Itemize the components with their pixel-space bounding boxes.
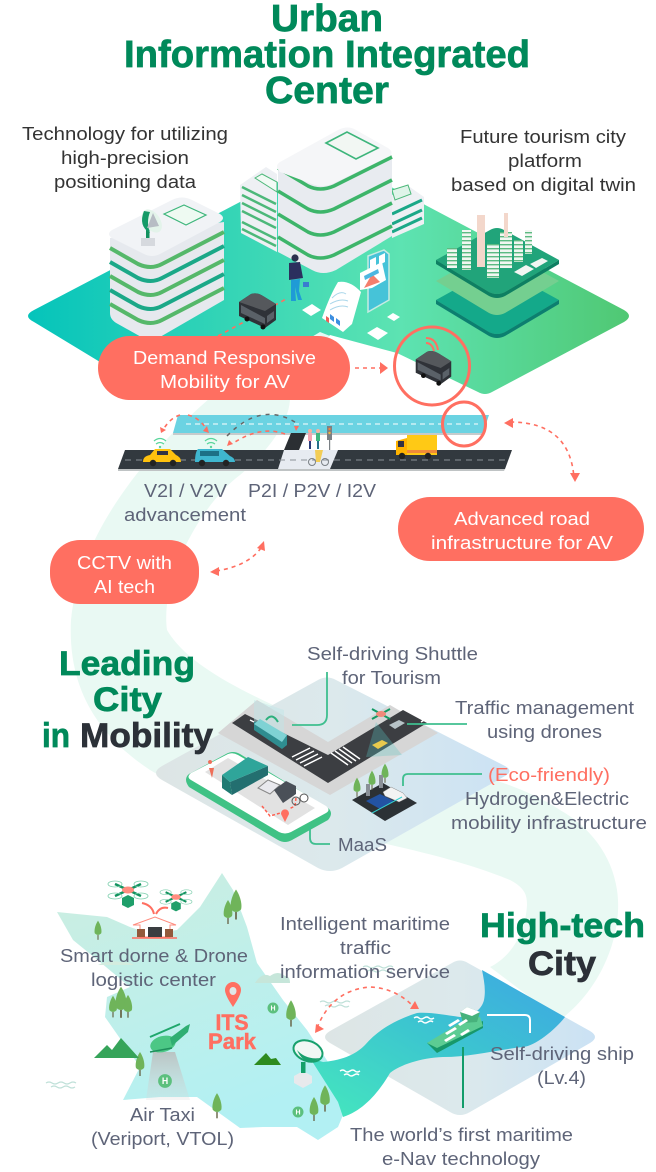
vehicle: yellow car: [143, 438, 181, 466]
icon: mountains: [94, 1038, 281, 1065]
title: Information Integrated: [124, 34, 530, 76]
labels: mobility features: Self-driving Shuttle: [307, 643, 478, 664]
labels: V2I, P2I: [124, 480, 377, 525]
labels: smart drone logistic center: logistic center: [91, 969, 216, 990]
road: upper blue lane: [173, 415, 489, 435]
chart: road intersection: [218, 700, 438, 795]
arrow: CCTV link: [210, 541, 265, 576]
labels: mobility features: MaaS: [338, 834, 387, 855]
title: [124, 0, 530, 112]
connector: MaaS label: [310, 826, 330, 844]
callout: CCTV with AI tech: CCTV with: [77, 552, 172, 573]
heading: Leading City in Mobility: [42, 645, 213, 755]
building: central office tower: [240, 128, 424, 273]
heading: High-tech City: High-tech: [480, 907, 645, 945]
callout: demand responsive mobility: Demand Responsive: [133, 347, 316, 368]
icon: satellite dish: [290, 1036, 326, 1088]
labels: mobility features: Traffic management: [455, 697, 634, 718]
text: digital twin platform: Future tourism city: [460, 126, 627, 147]
arrow: road to infrastructure callout: [504, 418, 580, 482]
heading: Leading City in Mobility: Leading: [59, 645, 195, 683]
waves on sea: [340, 1017, 434, 1076]
vehicle: shuttle on platform: [239, 293, 276, 330]
labels: mobility features: mobility infrastructure: [451, 812, 647, 833]
connector: eco label: [403, 774, 482, 786]
arrow: bubble to autonomous shuttle: [355, 362, 388, 374]
labels: smart drone logistic center: [60, 945, 248, 990]
callout: demand responsive mobility: [98, 336, 350, 400]
map: sea channel: [310, 970, 565, 1117]
text: digital twin platform: [451, 126, 636, 195]
icon: ITS park pin and name: ITS: [216, 1010, 248, 1035]
labels: e-Nav technology: The world’s first maritime: [350, 1124, 573, 1145]
labels: V2I, P2I: P2I / P2V / I2V: [248, 480, 377, 501]
labels: self-driving ship: (Lv.4): [537, 1067, 586, 1088]
icon: EV charging station: [352, 764, 417, 821]
map: ITS park land: [57, 873, 343, 1140]
icon: tourism shuttle bus: [254, 700, 287, 749]
connector: ship label: [487, 1015, 530, 1033]
text: positioning data technology: [22, 123, 228, 192]
heading: High-tech City: City: [528, 945, 596, 983]
icon: autonomous shuttle in ring: [394, 327, 470, 405]
arrows: V2X communication arcs: [160, 414, 299, 446]
trees on land: [95, 890, 330, 1121]
arrow: maritime communication arc: [315, 987, 419, 1033]
labels: intelligent maritime service: [280, 913, 450, 982]
pedestrians, cyclist and traffic light: [308, 426, 332, 466]
background mint S-curve band: [71, 398, 618, 1020]
callout: demand responsive mobility: Mobility for AV: [160, 371, 291, 392]
text: positioning data technology: high-precision: [61, 147, 189, 168]
text: digital twin platform: platform: [508, 150, 582, 171]
connector: traffic label: [407, 723, 467, 725]
dashed link shuttle to person: [218, 298, 288, 336]
heading: Leading City in Mobility: Mobility: [80, 717, 213, 755]
icon: traffic drone with scan cone: [366, 709, 405, 757]
labels: air taxi: Air Taxi: [130, 1104, 195, 1125]
labels: e-Nav technology: [350, 1124, 573, 1169]
data phone and report scroll: [302, 250, 400, 343]
ring: road infrastructure: [442, 402, 486, 446]
icon: autonomous ship: [427, 1007, 483, 1053]
panel: green data center platform: [28, 158, 629, 394]
text: positioning data technology: positioning data: [54, 171, 197, 192]
building: left satellite tower: [109, 198, 224, 340]
callout: advanced road infrastructure: Advanced road: [454, 508, 590, 529]
labels: mobility features: (Eco-friendly): [488, 764, 610, 785]
labels: e-Nav technology: e-Nav technology: [382, 1148, 541, 1169]
heading: Leading City in Mobility: in: [42, 717, 70, 755]
figure: business person: [289, 254, 309, 301]
icon: logistics center: [132, 917, 177, 938]
labels: mobility features: Hydrogen&Electric: [465, 788, 629, 809]
text: digital twin platform: based on digital twin: [451, 174, 636, 195]
labels: V2I, P2I: advancement: [124, 504, 246, 525]
icon: smartphone MaaS map: [186, 752, 331, 842]
road: lower dark road with crossing: [118, 433, 512, 471]
text: positioning data technology: Technology for utilizing: [22, 123, 228, 144]
labels: intelligent maritime service: traffic: [340, 937, 391, 958]
panel: digital twin city layers: [436, 213, 559, 338]
vehicle: blue car: [195, 438, 235, 466]
icon: air taxi helicopter: [146, 1024, 190, 1100]
callout: CCTV with AI tech: [50, 540, 199, 604]
callout: CCTV with AI tech: AI tech: [94, 576, 155, 597]
labels: smart drone logistic center: Smart dorne & Drone: [60, 945, 248, 966]
heading: Leading City in Mobility: City: [93, 681, 162, 719]
labels: mobility features: for Tourism: [342, 667, 441, 688]
labels: intelligent maritime service: information service: [280, 961, 450, 982]
callout: advanced road infrastructure: infrastructure for AV: [431, 532, 614, 553]
labels: air taxi: (Veriport, VTOL): [91, 1128, 234, 1149]
icons: helipads: [268, 1002, 304, 1118]
labels: V2I, P2I: V2I / V2V: [144, 480, 228, 501]
icon: delivery drones: [108, 881, 192, 914]
connector: shuttle label: [292, 672, 327, 725]
labels: self-driving ship: Self-driving ship: [490, 1043, 634, 1064]
labels: intelligent maritime service: Intelligent maritime: [280, 913, 450, 934]
vehicle: yellow truck: [396, 435, 437, 459]
icon: ITS park pin and name: Park: [208, 1029, 257, 1054]
icon: ITS park pin and name: [208, 982, 257, 1054]
labels: air taxi: [91, 1104, 234, 1149]
connector: e-Nav label: [462, 1047, 464, 1108]
panel: mobility platform: [156, 678, 510, 871]
labels: mobility features: using drones: [487, 721, 602, 742]
clouds and waves: [46, 961, 393, 1088]
heading: High-tech City: [480, 907, 645, 983]
labels: self-driving ship: [490, 1043, 634, 1088]
labels: mobility features: [307, 643, 647, 855]
callout: advanced road infrastructure: [398, 497, 644, 561]
title: Center: [265, 70, 389, 112]
panel: maritime platform: [325, 960, 595, 1115]
